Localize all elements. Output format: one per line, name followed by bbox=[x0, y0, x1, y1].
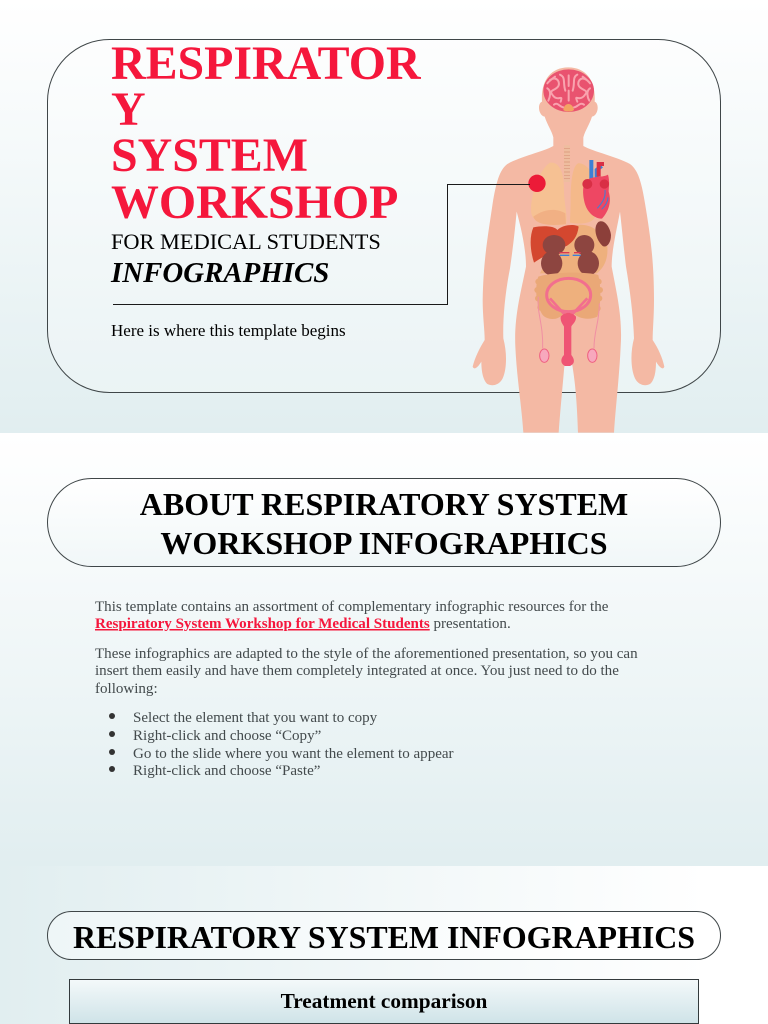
spleen bbox=[595, 221, 611, 247]
digestive organs background bbox=[540, 225, 607, 273]
heading: about bbox=[140, 486, 628, 561]
heart bbox=[582, 160, 610, 219]
heading: about: ABOUT RESPIRATORY SYSTEM bbox=[140, 486, 628, 522]
title: Respiratory System Workshop bbox=[111, 37, 421, 229]
list: steps: Right-click and choose “Copy” bbox=[133, 728, 321, 744]
text block: about intro: insert them easily and have them completely integrated at once. You just need to do the bbox=[95, 663, 619, 679]
brain bbox=[543, 69, 594, 112]
title: Respiratory System Workshop: WORKSHOP bbox=[111, 176, 398, 229]
red marker dot bbox=[528, 175, 546, 192]
background: infographics section bbox=[0, 866, 768, 1024]
text block: about intro: following: bbox=[95, 681, 158, 697]
ureter vessels bbox=[559, 251, 581, 255]
background: cover section bbox=[0, 0, 768, 433]
text block: about intro: Respiratory System Workshop for Medical Students presentation. bbox=[95, 616, 511, 632]
list: steps bbox=[109, 710, 454, 779]
panel: infographics heading pill bbox=[48, 912, 720, 960]
list: steps: Select the element that you want to copy bbox=[133, 710, 378, 726]
intestine bbox=[534, 273, 603, 319]
heading: about: WORKSHOP INFOGRAPHICS bbox=[160, 525, 608, 561]
illustration: human body with organs bbox=[473, 67, 664, 433]
trachea bbox=[564, 145, 570, 182]
liver bbox=[531, 225, 579, 263]
tagline: Here is where this template begins bbox=[111, 321, 346, 340]
subtitle: infographics: INFOGRAPHICS bbox=[110, 257, 329, 289]
background: about section bbox=[0, 433, 768, 866]
lungs bbox=[531, 163, 597, 225]
panel: treatment comparison header bbox=[70, 980, 698, 1024]
list: steps: Go to the slide where you want the element to appear bbox=[133, 746, 454, 762]
connector line from title to lungs bbox=[113, 184, 530, 304]
title: Respiratory System Workshop: SYSTEM bbox=[111, 129, 308, 182]
title: Respiratory System Workshop: RESPIRATOR bbox=[111, 37, 421, 90]
body silhouette bbox=[473, 67, 664, 433]
pelvis bladder bbox=[547, 278, 591, 315]
reproductive organs bbox=[538, 297, 599, 366]
text block: about intro: This template contains an assortment of complementary infographic resources for the bbox=[95, 599, 609, 615]
heading: infographics: RESPIRATORY SYSTEM INFOGRAPHICS bbox=[73, 920, 695, 955]
panel: about heading pill bbox=[48, 478, 720, 566]
kidneys bbox=[541, 235, 599, 275]
title: Respiratory System Workshop: Y bbox=[111, 83, 146, 136]
list: steps: Right-click and choose “Paste” bbox=[133, 763, 320, 779]
subtitle: for medical students: FOR MEDICAL STUDENTS bbox=[111, 229, 381, 254]
text block: about intro: These infographics are adapted to the style of the aforementioned presentation, so you can bbox=[95, 646, 638, 662]
heading: treatment comparison: Treatment comparison bbox=[281, 989, 488, 1013]
panel: cover rounded frame bbox=[48, 40, 720, 392]
text block: about intro bbox=[95, 599, 638, 697]
